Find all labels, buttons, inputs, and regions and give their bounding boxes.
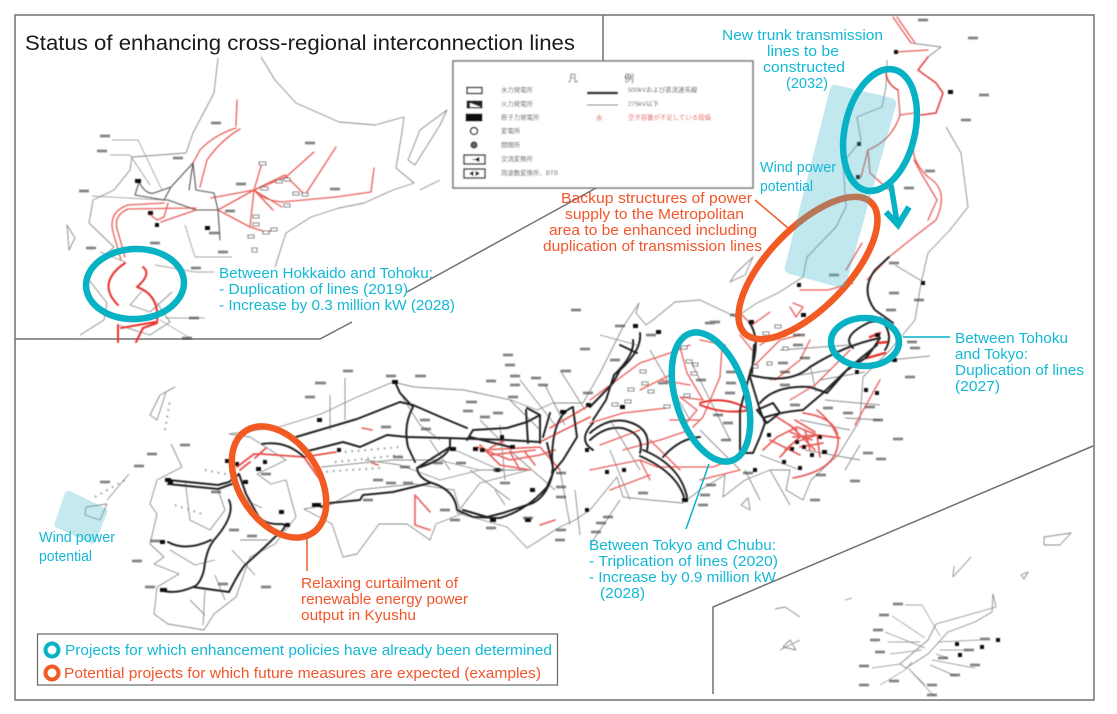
legend heading second character: 例	[624, 72, 634, 85]
Kyushu and west regional thin lines	[170, 378, 345, 625]
callout: Hokkaido and Tohoku: - Duplication of lines (2019)	[219, 281, 408, 298]
callout: Tokyo and Chubu: - Triplication of lines (2020)	[589, 553, 778, 570]
legend station labels: 周波数変換所、BTB	[501, 168, 558, 177]
callout: Kyushu curtailment: output in Kyushu	[301, 607, 416, 624]
leader: Tokyo and Chubu	[686, 464, 709, 529]
orange ellipse: Kyushu	[212, 409, 346, 555]
callout: Kyushu curtailment: renewable energy power	[301, 591, 468, 608]
Hokkaido to Tohoku link	[109, 263, 157, 342]
legend line samples: 275kV以下	[628, 100, 660, 108]
callout: metropolitan backup: supply to the Metropolitan	[565, 206, 744, 223]
Kinki black lines	[467, 333, 640, 473]
legend line samples: 500kVおよび直流連系線	[628, 85, 698, 94]
label: wind power potential Tohoku: potential	[760, 178, 813, 195]
Kyushu black lines	[161, 474, 285, 592]
label: wind power potential Kyushu: potential	[39, 548, 92, 565]
wind power potential area: Tohoku	[785, 85, 896, 288]
teal ellipse: Tohoku-Tokyo	[831, 318, 899, 366]
callout: Tohoku and Tokyo: Duplication of lines	[955, 362, 1084, 379]
Inland Sea islands and extra coast detail	[95, 400, 400, 515]
Tohoku-Tokyo red links	[867, 333, 888, 358]
legend station labels: 開閉所	[501, 141, 521, 149]
Hokkaido coastline	[67, 57, 447, 335]
legend station labels: 水力発電所	[501, 85, 534, 94]
leader: metropolitan backup	[755, 200, 788, 228]
regional gray sub-lines	[365, 265, 930, 545]
callout: new trunk lines: New trunk transmission	[722, 27, 883, 44]
callout: Tohoku and Tokyo: Between Tohoku	[955, 330, 1068, 347]
callout: Hokkaido and Tohoku: Between Hokkaido and Tohoku:	[219, 265, 433, 282]
legend marker: potential projects	[46, 666, 58, 680]
Honshu, Kyushu and Shikoku coastlines	[85, 17, 968, 630]
Chugoku black lines	[262, 382, 553, 518]
legend station labels	[501, 85, 558, 177]
legend text: potential projects: Potential projects for which future measures are expected (examples)	[64, 665, 541, 682]
teal ellipse: Hokkaido-Tohoku	[84, 246, 186, 322]
Tohoku red lines	[790, 17, 943, 317]
legend line samples	[587, 85, 711, 122]
small label marks on map	[79, 20, 990, 695]
Hokkaido black lines	[135, 163, 220, 240]
legend station labels: 変電所	[501, 126, 521, 135]
Okinawa leader lines	[872, 605, 980, 696]
callout: Tokyo and Chubu: Between Tokyo and Chubu:	[589, 537, 776, 554]
central red lines	[590, 310, 880, 490]
callout: metropolitan backup: Backup structures of power	[561, 190, 752, 207]
Okinawa islands	[775, 533, 1071, 668]
callout: new trunk lines: constructed	[763, 59, 845, 76]
callout: Tohoku and Tokyo: (2027)	[955, 378, 1000, 395]
legend station labels: 原子力発電所	[501, 112, 540, 122]
callout: metropolitan backup: area to be enhanced including	[549, 222, 757, 239]
station markers	[135, 52, 1000, 655]
Eastern black lines	[740, 257, 893, 453]
teal ellipse: Tokyo-Chubu	[657, 322, 765, 472]
Chubu ring black lines	[590, 420, 700, 497]
legend station icons	[464, 88, 485, 178]
project legend box	[38, 634, 558, 685]
leader: Tohoku and Tokyo	[903, 336, 950, 338]
legend text: determined projects: Projects for which enhancement policies have already been determined	[65, 642, 552, 659]
Hokkaido leader lines	[92, 140, 232, 338]
callout: new trunk lines: lines to be	[767, 43, 839, 60]
Hokkaido hydro station markers	[248, 162, 308, 252]
callout: Tokyo and Chubu: - Increase by 0.9 million kW	[589, 569, 777, 586]
northern Kyushu red lines	[237, 448, 336, 477]
arrow: new trunk lines downwards	[886, 185, 909, 225]
legend line samples: 空き容量が不足している設備	[628, 112, 711, 122]
map legend box	[453, 61, 753, 188]
callout: metropolitan backup: duplication of transmission lines	[543, 238, 762, 255]
title: Status of enhancing cross-regional interconnection lines	[25, 32, 575, 55]
callout: Kyushu curtailment: Relaxing curtailment of	[301, 575, 459, 592]
Kinki and western red lines	[362, 405, 590, 530]
callout: Tokyo and Chubu: (2028)	[600, 585, 645, 602]
wind power potential area: Kyushu	[54, 491, 107, 544]
leader: Kyushu	[306, 539, 308, 571]
central hydro station markers	[612, 325, 788, 408]
callout: Hokkaido and Tohoku: - Increase by 0.3 million kW (2028)	[219, 297, 455, 314]
legend heading: 凡	[568, 73, 578, 85]
legend marker: determined projects	[46, 644, 58, 656]
legend line samples: 赤	[596, 114, 603, 122]
Chubu red double line	[700, 400, 750, 412]
orange ellipse: metropolitan backup	[716, 175, 900, 361]
Kanto red network	[763, 410, 840, 478]
callout: new trunk lines: (2032)	[786, 75, 828, 92]
callout: Tohoku and Tokyo: and Tokyo:	[955, 346, 1028, 363]
label: wind power potential Kyushu: Wind power	[39, 529, 115, 546]
Tohoku thick red line	[886, 57, 943, 115]
teal ellipse: new trunk lines	[832, 62, 928, 198]
Hokkaido transmission lines	[112, 100, 374, 260]
label: wind power potential Tohoku: Wind power	[760, 159, 836, 176]
legend station labels: 火力発電所	[501, 99, 534, 108]
legend station labels: 交流変換所	[501, 154, 534, 163]
